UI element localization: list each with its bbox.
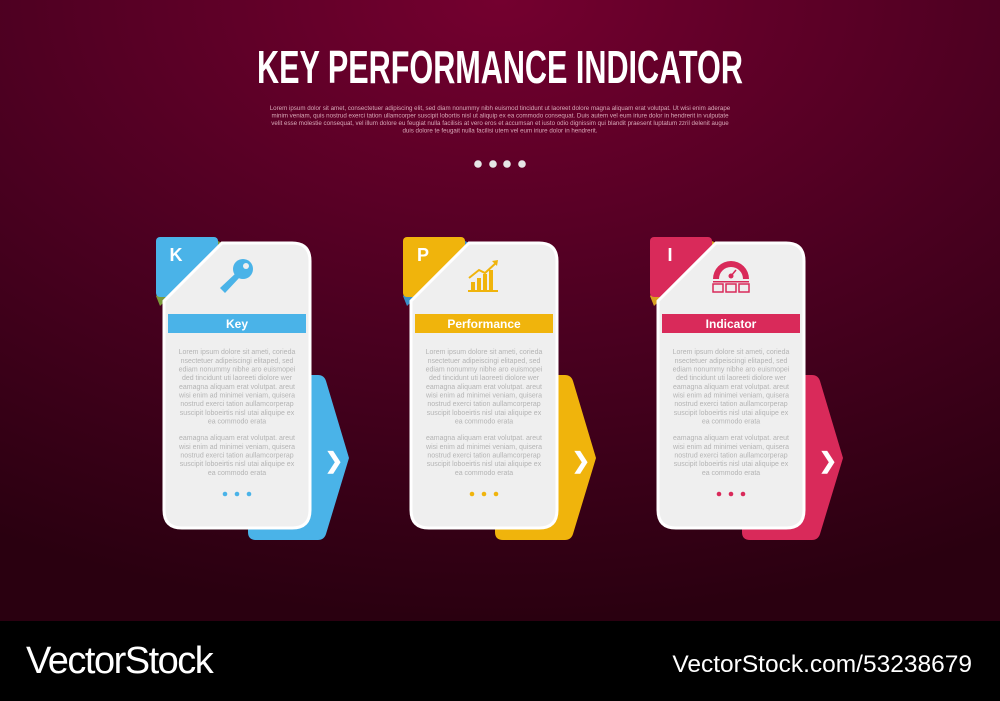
header bar: Performance — [447, 317, 521, 331]
card: Key — [156, 237, 349, 540]
icon: growth chart — [468, 260, 498, 292]
body text: ea commodo erata — [702, 418, 760, 426]
body text: ea commodo erata — [702, 470, 760, 477]
subtitle text: duis dolore te feugait nulla facilisi utem vel eum iriure dolor in hendrerit. — [402, 128, 598, 134]
body text: ea commodo erata — [208, 418, 266, 426]
footer bar: VectorStock.com/53238679 — [672, 651, 972, 678]
body text: ded tincidunt uti laoreeti diolore wer — [429, 375, 540, 382]
icon: key — [220, 259, 253, 293]
card dots — [717, 492, 745, 496]
arrow block: ❯ — [325, 448, 343, 474]
body text: wisi enim ad minimei veniam, quisera — [178, 444, 295, 451]
body text: suscipit loboeirtis nisl utai aliquipe ex — [427, 410, 542, 417]
body text — [425, 349, 543, 477]
body text: nostrud exerci tation aullamcorperap — [674, 401, 788, 408]
footer bar: VectorStock — [26, 640, 215, 682]
body text — [178, 349, 296, 477]
footer bar — [0, 621, 1000, 701]
dots — [474, 160, 526, 168]
body text: eamagna aliquam erat volutpat. areut — [179, 435, 295, 442]
body text: nsectetuer adipeiscingi elitaped, sed — [675, 358, 788, 365]
body text: ediam nonummy nibhe aro euismopei — [426, 366, 543, 374]
body text: eamagna aliquam erat volutpat. areut — [673, 435, 789, 442]
tab K — [156, 237, 224, 306]
body text: ea commodo erata — [208, 470, 266, 477]
body text: nostrud exerci tation aullamcorperap — [427, 401, 541, 408]
body text: wisi enim ad minimei veniam, quisera — [425, 392, 542, 400]
body text: suscipit loboeirtis nisl utai aliquipe ex — [180, 461, 295, 468]
body text: suscipit loboeirtis nisl utai aliquipe ex — [180, 410, 295, 417]
subtitle text: minim veniam, quis nostrud exerci tation ullamcorper suscipit lobortis nisl ut aliquip ex ea commodo consequat. Duis autem vel eum iriure dolor in hendrerit in vulputate — [271, 112, 729, 120]
body text: nostrud exerci tation aullamcorperap — [674, 452, 788, 460]
body text: Lorem ipsum dolore sit ameti, corieda — [426, 349, 542, 356]
body text: wisi enim ad minimei veniam, quisera — [425, 444, 542, 451]
body text: nsectetuer adipeiscingi elitaped, sed — [428, 358, 541, 365]
body text: Lorem ipsum dolore sit ameti, corieda — [673, 349, 789, 356]
arrow block — [248, 375, 349, 540]
body text: eamagna aliquam erat volutpat. areut — [426, 384, 542, 391]
arrow block — [495, 375, 596, 540]
header bar — [662, 314, 800, 333]
title: KEY PERFORMANCE INDICATOR — [257, 43, 743, 94]
body text: eamagna aliquam erat volutpat. areut — [426, 435, 542, 442]
card dots — [470, 492, 498, 496]
icon: gauge — [713, 261, 749, 292]
body text: eamagna aliquam erat volutpat. areut — [179, 384, 295, 391]
body text: suscipit loboeirtis nisl utai aliquipe ex — [427, 461, 542, 468]
body text: suscipit loboeirtis nisl utai aliquipe ex — [674, 410, 789, 417]
body text: nostrud exerci tation aullamcorperap — [427, 452, 541, 460]
body text: Lorem ipsum dolore sit ameti, corieda — [179, 349, 295, 356]
card: Indicator — [650, 237, 843, 540]
body text: nostrud exerci tation aullamcorperap — [180, 401, 294, 408]
tab K: K — [170, 245, 182, 265]
body text: nostrud exerci tation aullamcorperap — [180, 452, 294, 460]
body text: ea commodo erata — [455, 470, 513, 477]
body text: wisi enim ad minimei veniam, quisera — [178, 392, 295, 400]
body text: suscipit loboeirtis nisl utai aliquipe ex — [674, 461, 789, 468]
tab I — [650, 237, 718, 306]
body text: eamagna aliquam erat volutpat. areut — [673, 384, 789, 391]
body text: wisi enim ad minimei veniam, quisera — [672, 444, 789, 451]
body text: nsectetuer adipeiscingi elitaped, sed — [181, 358, 294, 365]
body text — [672, 349, 790, 477]
body text: ediam nonummy nibhe aro euismopei — [179, 366, 296, 374]
body text: ded tincidunt uti laoreeti diolore wer — [182, 375, 293, 382]
subtitle text: Lorem ipsum dolor sit amet, consectetuer adipiscing elit, sed diam nonummy nibh euismod tincidunt ut laoreet dolore magna aliquam erat volutpat. Ut wisi enim aderape — [270, 105, 731, 112]
header bar — [168, 314, 306, 333]
tab I: I — [667, 245, 673, 265]
subtitle text — [270, 105, 731, 134]
body text: wisi enim ad minimei veniam, quisera — [672, 392, 789, 400]
tab P: P — [417, 245, 429, 265]
arrow block: ❯ — [819, 448, 837, 474]
card dots — [223, 492, 251, 496]
header bar — [415, 314, 553, 333]
body text: ea commodo erata — [455, 418, 513, 426]
header bar: Indicator — [706, 317, 757, 331]
tab P — [403, 237, 471, 306]
header bar: Key — [226, 317, 248, 331]
arrow block — [742, 375, 843, 540]
subtitle text: velit esse molestie consequat, vel illum dolore eu feugiat nulla facilisis at vero eros et accumsan et iusto odio dignissim qui blandit praesent luptatum zzril delenit augue — [271, 120, 729, 127]
body text: ded tincidunt uti laoreeti diolore wer — [676, 375, 787, 382]
arrow block: ❯ — [572, 448, 590, 474]
body text: ediam nonummy nibhe aro euismopei — [673, 366, 790, 374]
card: Performance — [403, 237, 596, 540]
